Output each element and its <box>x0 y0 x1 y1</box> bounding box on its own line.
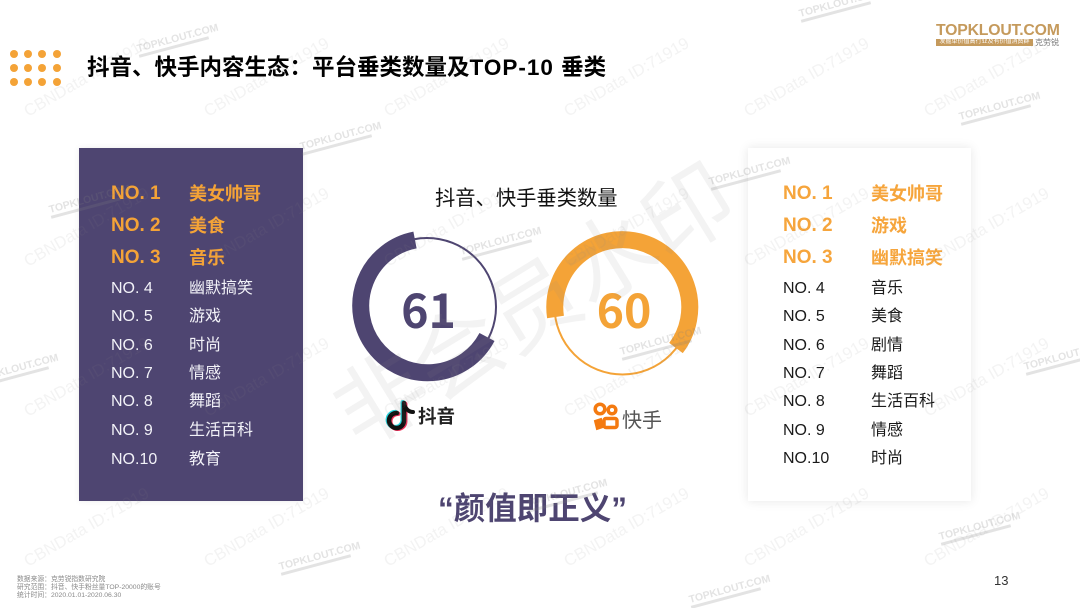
watermark overlay: CBNData ID:71919 <box>741 334 872 420</box>
rank 9 <box>783 421 903 439</box>
rank 1 <box>111 183 261 204</box>
rank 4: 幽默搞笑 <box>189 280 253 297</box>
watermark overlay: CBNData ID:71919 <box>381 484 512 570</box>
source note: 统计时间：2020.01.01-2020.06.30 <box>17 592 121 599</box>
rank 1: NO. 1 <box>111 183 161 204</box>
logo: TOPKLOUT: TOPKLOUT.COM <box>936 22 1060 39</box>
rank 2: NO. 2 <box>111 215 161 236</box>
rank 4 <box>111 279 253 297</box>
watermark overlay: 非会员水印 <box>317 147 753 467</box>
watermark overlay: CBNData ID:71919 <box>201 334 332 420</box>
rank 8: 生活百科 <box>871 393 935 410</box>
rank 6: 剧情 <box>871 337 903 354</box>
page number: 13 <box>994 573 1008 588</box>
watermark overlay: CBNData ID:71919 <box>561 334 692 420</box>
watermark overlay: CBNData ID:71919 <box>381 184 512 270</box>
rank 10: NO.10 <box>783 450 829 467</box>
icon: orange dot grid <box>10 50 61 86</box>
source note <box>17 575 161 599</box>
panel: 快手 top-10 ranking <box>748 148 971 501</box>
rank 7: NO. 7 <box>783 365 825 382</box>
rank 3 <box>111 247 225 268</box>
watermark overlay: TOPKLOUT.COM <box>619 325 703 358</box>
watermark overlay: TOPKLOUT.COM <box>525 477 609 510</box>
rank 6 <box>111 336 221 354</box>
rank 6: 时尚 <box>189 337 221 354</box>
rank 6 <box>783 336 903 354</box>
rank 9: 生活百科 <box>189 422 253 439</box>
rank 1: 美女帅哥 <box>189 184 261 204</box>
rank 2: NO. 2 <box>783 215 833 236</box>
rank 10: 时尚 <box>871 450 903 467</box>
label: 抖音: 抖音 <box>418 406 455 427</box>
rank 2: 美食 <box>189 216 225 236</box>
watermark overlay: CBNData ID:71919 <box>21 484 152 570</box>
rank 5: NO. 5 <box>111 308 153 325</box>
chart heading: 抖音、快手垂类数量 <box>435 188 618 210</box>
watermark overlay: CBNData ID:71919 <box>741 184 872 270</box>
rank 5: 美食 <box>871 308 903 325</box>
rank 10 <box>111 450 221 468</box>
rank 3: NO. 3 <box>783 247 833 268</box>
rank 4: NO. 4 <box>111 280 153 297</box>
rank 2 <box>783 215 907 236</box>
icon: 快手 logo <box>595 404 617 429</box>
rank 9 <box>111 421 253 439</box>
watermark overlay: CBNData ID:71919 <box>921 184 1052 270</box>
rank 9: NO. 9 <box>783 422 825 439</box>
watermark overlay: CBNData ID:71919 <box>921 484 1052 570</box>
watermark overlay: CBNData ID:71919 <box>381 34 512 120</box>
rank 7 <box>783 364 903 382</box>
rank 4 <box>783 279 903 297</box>
rank 4: NO. 4 <box>783 280 825 297</box>
watermark overlay: CBNData ID:71919 <box>21 184 152 270</box>
rank 2 <box>111 215 225 236</box>
callout: “颜值即正义” <box>438 490 627 526</box>
watermark overlay: CBNData ID:71919 <box>561 184 692 270</box>
watermark overlay: CBNData ID:71919 <box>201 484 332 570</box>
rank 6: NO. 6 <box>783 337 825 354</box>
watermark overlay: TOPKLOUT.COM <box>278 540 362 573</box>
rank 8: NO. 8 <box>111 393 153 410</box>
panel: 抖音 top-10 ranking <box>79 148 303 501</box>
watermark overlay: CBNData ID:71919 <box>741 34 872 120</box>
rank 7 <box>111 364 221 382</box>
rank 3: 幽默搞笑 <box>871 248 943 268</box>
logo: TOPKLOUT: 克劳锐 <box>1035 38 1059 47</box>
rank 4: 音乐 <box>871 280 903 297</box>
rank 7: 舞蹈 <box>871 365 903 382</box>
rank 8: 舞蹈 <box>189 393 221 410</box>
watermark overlay: CBNData ID:71919 <box>921 34 1052 120</box>
rank 1 <box>783 183 943 204</box>
watermark overlay: CBNData ID:71919 <box>21 34 152 120</box>
logo: TOPKLOUT: 发掘单价值高行业及有价值消费群 <box>939 39 1030 45</box>
watermark overlay: CBNData ID:71919 <box>741 484 872 570</box>
watermark overlay: TOPKLOUT.COM <box>459 225 543 258</box>
rank 8: NO. 8 <box>783 393 825 410</box>
rank 10: 教育 <box>189 451 221 468</box>
watermark overlay: TOPKLOUT.COM <box>958 90 1042 123</box>
title: 抖音、快手内容生态：平台垂类数量及TOP-10 垂类 <box>87 55 606 80</box>
label: 快手: 快手 <box>622 409 662 432</box>
watermark overlay: CBNData ID:71919 <box>201 34 332 120</box>
source note: 数据来源：克劳锐指数研究院 <box>17 576 105 583</box>
rank 10 <box>783 449 903 467</box>
watermark overlay: TOPKLOUT.COM <box>688 573 772 606</box>
source note: 研究范围：抖音、快手粉丝量TOP-20000的账号 <box>17 584 161 591</box>
rank 1: 美女帅哥 <box>871 184 943 204</box>
rank 3: 音乐 <box>189 248 225 268</box>
watermark overlay: TOPKLOUT.COM <box>299 120 383 153</box>
watermark overlay: CBNData ID:71919 <box>201 184 332 270</box>
ring: 快手 60: 60 <box>597 275 651 342</box>
rank 3 <box>783 247 943 268</box>
rank 5 <box>111 307 221 325</box>
rank 2: 游戏 <box>871 216 907 236</box>
rank 9: 情感 <box>871 422 903 439</box>
rank 7: NO. 7 <box>111 365 153 382</box>
logo: TOPKLOUT <box>936 22 1060 47</box>
rank 8 <box>111 392 221 410</box>
rank 8 <box>783 392 935 410</box>
watermark overlay: CBNData ID:71919 <box>561 484 692 570</box>
ring: 抖音 61 <box>358 238 496 376</box>
rank 5: NO. 5 <box>783 308 825 325</box>
rank 1: NO. 1 <box>783 183 833 204</box>
watermark overlay: TOPKLOUT.COM <box>136 22 220 55</box>
rank 3: NO. 3 <box>111 247 161 268</box>
rank 7: 情感 <box>189 365 221 382</box>
rank 6: NO. 6 <box>111 337 153 354</box>
rank 5: 游戏 <box>189 308 221 325</box>
watermark overlay: TOPKLOUT.COM <box>708 155 792 188</box>
rank 5 <box>783 307 903 325</box>
watermark overlay: TOPKLOUT.COM <box>48 183 132 216</box>
rank 10: NO.10 <box>111 451 157 468</box>
icon: 抖音 logo <box>388 402 413 429</box>
watermark overlay: CBNData ID:71919 <box>921 334 1052 420</box>
watermark overlay: CBNData ID:71919 <box>381 334 512 420</box>
rank 9: NO. 9 <box>111 422 153 439</box>
watermark overlay: CBNData ID:71919 <box>561 34 692 120</box>
watermark overlay: CBNData ID:71919 <box>21 334 152 420</box>
watermark overlay: TOPKLOUT.COM <box>938 510 1022 543</box>
ring: 快手 60 <box>554 238 690 374</box>
ring: 抖音 61: 61 <box>401 275 456 342</box>
